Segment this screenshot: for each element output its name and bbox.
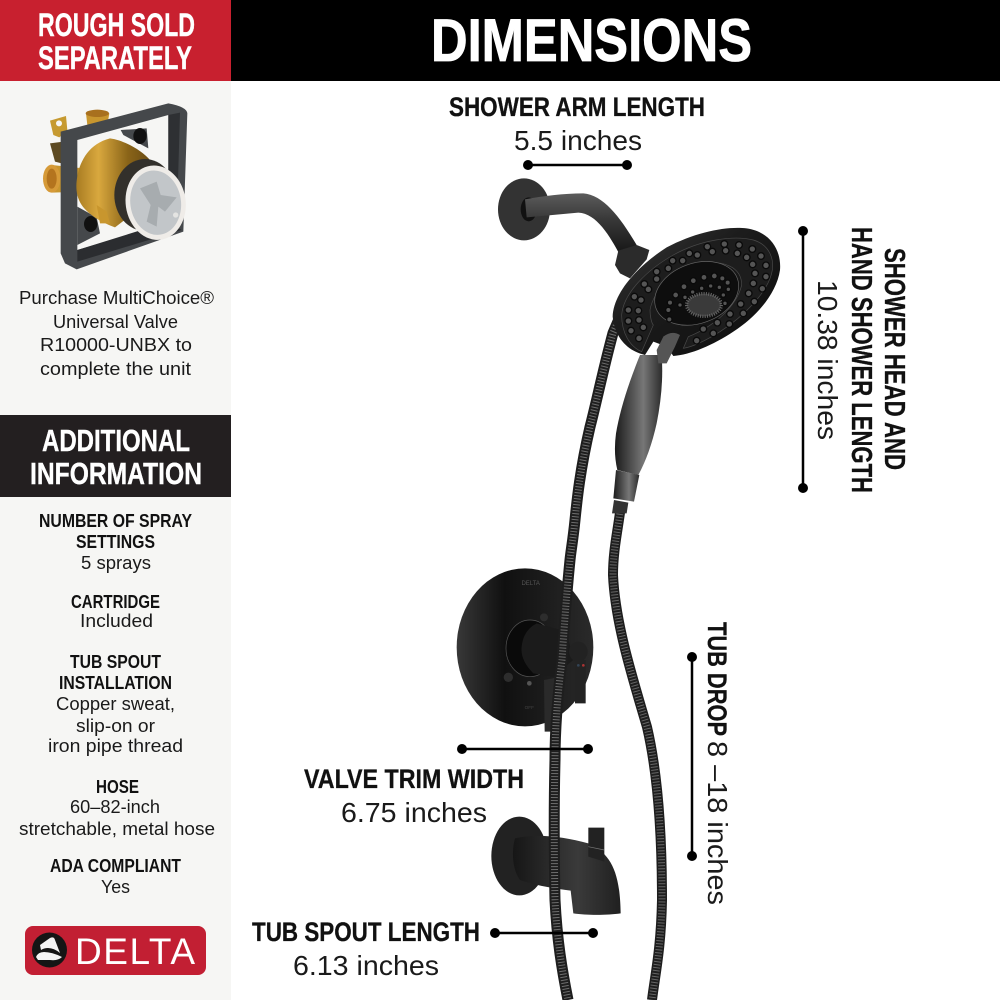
spec: hose bbox=[19, 777, 215, 839]
image: valve trim bbox=[457, 568, 593, 732]
image: front hose bbox=[554, 312, 622, 1000]
label: tub drop: 8 –18 inches bbox=[702, 741, 733, 905]
spec: tub spout installation: Copper sweat, bbox=[56, 694, 175, 714]
dimension line: valve trim width bbox=[457, 744, 593, 754]
label: shower head and hand shower length: HAND SHOWER LENGTH bbox=[845, 227, 877, 493]
image: hand shower body bbox=[612, 355, 662, 513]
logo: delta bbox=[25, 926, 206, 975]
label: valve trim width bbox=[304, 764, 524, 828]
label: tub spout length: TUB SPOUT LENGTH bbox=[252, 917, 480, 947]
heading: additional information: ADDITIONAL bbox=[42, 423, 190, 458]
label: tub drop: TUB DROP bbox=[702, 622, 732, 736]
spec: cartridge: CARTRIDGE bbox=[71, 592, 160, 612]
image: rough-in valve bbox=[43, 103, 191, 269]
logo: delta: DELTA bbox=[75, 931, 195, 972]
label: valve trim width: 6.75 inches bbox=[341, 797, 487, 828]
spec: number of spray settings bbox=[39, 511, 192, 573]
spec: cartridge: Included bbox=[80, 611, 153, 631]
text: purchase valve note: Purchase MultiChoice® bbox=[19, 288, 214, 308]
dimension line: shower arm bbox=[523, 160, 632, 170]
text: purchase valve note: R10000-UNBX to bbox=[40, 335, 192, 355]
label: shower arm length: 5.5 inches bbox=[514, 125, 642, 156]
banner: rough sold separately bbox=[0, 0, 231, 81]
spec: tub spout installation bbox=[48, 652, 183, 756]
image: back hose bbox=[613, 505, 662, 1000]
label: valve trim width: VALVE TRIM WIDTH bbox=[304, 764, 524, 794]
image: shower arm bbox=[498, 178, 649, 278]
label: shower arm length bbox=[449, 92, 705, 156]
image: valve trim: OFF bbox=[525, 705, 534, 710]
spec: tub spout installation: iron pipe thread bbox=[48, 736, 183, 756]
spec: hose: 60–82-inch bbox=[70, 797, 160, 817]
spec: tub spout installation: TUB SPOUT bbox=[70, 652, 161, 672]
spec: hose: stretchable, metal hose bbox=[19, 819, 215, 839]
spec: tub spout installation: INSTALLATION bbox=[59, 673, 172, 693]
spec: ada compliant bbox=[50, 856, 181, 897]
spec: number of spray settings: 5 sprays bbox=[81, 553, 151, 573]
spec: number of spray settings: SETTINGS bbox=[76, 532, 155, 552]
banner: rough sold separately: SEPARATELY bbox=[38, 40, 192, 76]
label: tub spout length: 6.13 inches bbox=[293, 950, 439, 981]
label: tub drop bbox=[702, 622, 733, 905]
title banner: dimensions bbox=[231, 0, 1000, 81]
text: purchase valve note: Universal Valve bbox=[53, 312, 178, 332]
image: shower head bbox=[613, 228, 780, 363]
image: valve trim: DELTA bbox=[521, 581, 540, 587]
label: shower head and hand shower length: 10.38 inches bbox=[812, 280, 843, 440]
spec: ada compliant: Yes bbox=[101, 877, 130, 897]
label: shower head and hand shower length: SHOWER HEAD AND bbox=[878, 248, 910, 470]
label: shower head and hand shower length bbox=[812, 227, 910, 493]
label: shower arm length: SHOWER ARM LENGTH bbox=[449, 92, 705, 122]
dimension line: tub drop bbox=[687, 652, 697, 861]
text: purchase valve note bbox=[19, 288, 214, 379]
spec: hose: HOSE bbox=[96, 777, 139, 797]
text: purchase valve note: complete the unit bbox=[40, 359, 191, 379]
spec: number of spray settings: NUMBER OF SPRAY bbox=[39, 511, 192, 531]
heading: additional information: INFORMATION bbox=[30, 456, 202, 491]
label: tub spout length bbox=[252, 917, 480, 981]
banner: rough sold separately: ROUGH SOLD bbox=[38, 7, 195, 43]
spec: cartridge bbox=[71, 592, 160, 631]
spec: tub spout installation: slip-on or bbox=[76, 716, 155, 736]
dimension line: tub spout length bbox=[490, 928, 598, 938]
title banner: dimensions: DIMENSIONS bbox=[431, 7, 752, 74]
panel: left sidebar background bbox=[0, 0, 231, 1000]
spec: ada compliant: ADA COMPLIANT bbox=[50, 856, 181, 876]
image: tub spout bbox=[491, 817, 621, 915]
heading: additional information bbox=[0, 415, 231, 497]
dimension line: shower head bbox=[798, 226, 808, 493]
